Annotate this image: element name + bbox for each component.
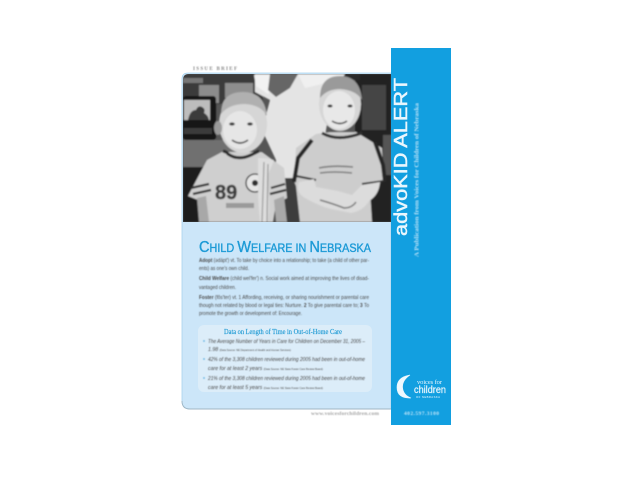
logo wordmark: voices for <box>417 379 443 386</box>
data panel heading: Data on Length of Time in Out-of-Home Care <box>224 327 343 336</box>
text block: definitions <box>199 258 369 317</box>
boy on left <box>188 92 287 222</box>
logo crescent <box>397 375 411 398</box>
bullet list of statistics: care for at least 2 years (Data Source: NE State Foster Care Review Board) <box>208 366 323 372</box>
boy on right <box>294 76 385 222</box>
adult in white shirt behind <box>254 74 345 222</box>
bullet list of statistics: 42% of the 3,308 children reviewed during 2005 had been in out-of-home <box>208 357 365 363</box>
sidebar title: advoKID ALERT: advoKID ALERT <box>391 78 411 236</box>
bullet list of statistics: care for at least 5 years (Data Source: NE State Foster Care Review Board) <box>208 385 323 391</box>
text block: definitions: Child Welfare (child wel'fer') n. Social work aimed at improving the lives of disad- <box>199 276 369 282</box>
bullet list of statistics <box>203 339 365 391</box>
background wall <box>183 74 391 222</box>
logo wordmark: OF NEBRASKA <box>416 395 440 399</box>
panel: light blue card <box>182 73 391 409</box>
photo: two young boys <box>183 74 391 222</box>
text block: definitions: ents) as one's own child. <box>199 266 249 272</box>
logo wordmark <box>414 379 446 399</box>
website address: www.voicesforchildren.com <box>311 411 379 417</box>
bullet list of statistics: 1.98 (Data Source: NE Department of Health and Human Services) <box>208 347 291 353</box>
sidebar subtitle: A Publication from Voices for Children of Nebraska <box>414 102 420 257</box>
text block: definitions: though not related by blood or legal ties: Nurture. 2 To give parental care to; 3 To <box>199 303 369 309</box>
issue brief label: ISSUE BRIEF <box>193 67 237 72</box>
boy on left: 89 <box>215 182 237 204</box>
bullet list of statistics: 21% of the 3,308 children reviewed during 2005 had been in out-of-home <box>207 376 365 382</box>
television <box>183 96 216 140</box>
text block: definitions: vantaged children. <box>199 285 236 291</box>
text block: definitions: Adopt (ǝdäpt') vt. To take by choice into a relationship; to take (a child of other par- <box>199 258 369 264</box>
text block: definitions: Foster (fôs'ter) vt. 1 Affording, receiving, or sharing nourishment or parental care <box>199 295 369 301</box>
bullet list of statistics: The Average Number of Years in Care for Children on December 31, 2005 – <box>208 339 365 345</box>
heading: Child Welfare in Nebraska: CHILD WELFARE IN NEBRASKA <box>199 239 371 256</box>
phone number: 402.597.3100 <box>404 411 439 417</box>
panel: data on length of time in out-of-home care <box>198 325 372 392</box>
logo: voices for children <box>397 375 446 399</box>
logo wordmark: children <box>414 385 446 396</box>
text block: definitions: promote the growth or development of: Encourage. <box>199 311 302 317</box>
panel: blue sidebar <box>391 48 451 425</box>
